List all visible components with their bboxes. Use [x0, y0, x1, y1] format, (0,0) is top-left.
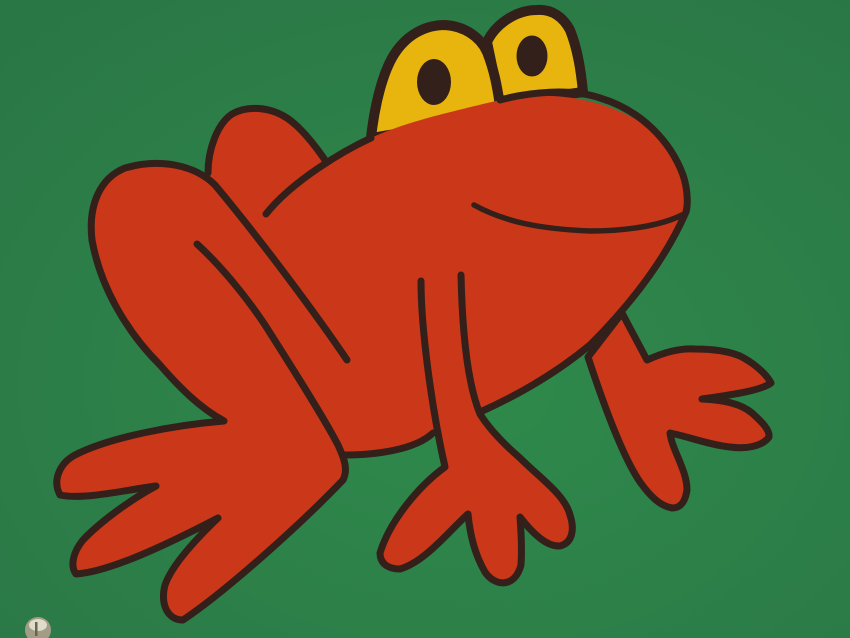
smile	[474, 205, 682, 231]
near-side front leg, right	[588, 313, 771, 508]
hind leg and foot	[57, 163, 347, 620]
left eye	[371, 25, 500, 138]
left eye yellow	[371, 25, 500, 138]
hump fill	[208, 108, 325, 230]
front leg and foot	[380, 275, 572, 583]
right eye	[487, 10, 583, 104]
left pupil	[417, 59, 451, 105]
body outline	[266, 92, 687, 455]
right eye yellow	[487, 10, 583, 104]
far hind leg hump	[208, 108, 325, 230]
body fill	[200, 96, 687, 460]
right pupil	[516, 36, 548, 76]
thumbtack rivet	[25, 617, 51, 638]
hump outline	[208, 108, 325, 173]
